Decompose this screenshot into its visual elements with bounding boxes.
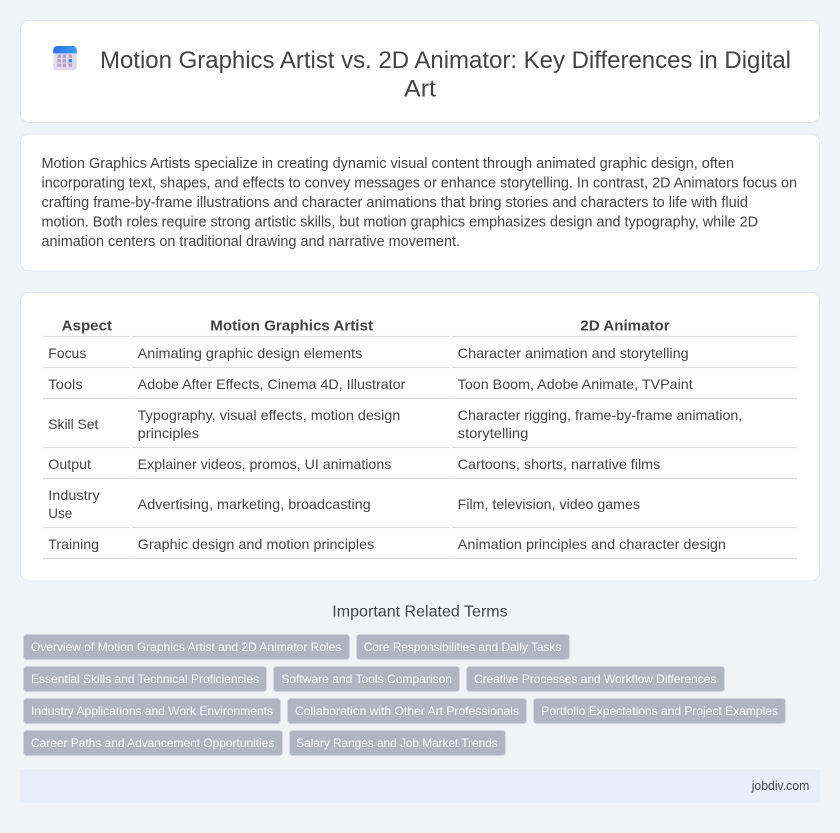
text block: description paragraph: animation centers on traditional drawing and narrative movement.: [42, 234, 460, 250]
table header row: [43, 318, 797, 336]
table row: Training: [43, 536, 797, 558]
table header row: Aspect: [62, 318, 112, 334]
table row: Training: Training: [48, 536, 99, 552]
tag: Overview of Motion Graphics Artist and 2D Animator Roles: [31, 640, 341, 654]
table row: Focus: [43, 345, 797, 368]
tag: Career Paths and Advancement Opportunities: [31, 736, 274, 750]
tag: [24, 634, 350, 660]
table row: Skill Set: Skill Set: [48, 416, 98, 432]
heading: Important Related Terms: Important Related Terms: [332, 604, 508, 620]
table row: Industry Use: Industry: [48, 487, 100, 503]
table row: Tools: Tools: [48, 376, 83, 392]
table row: Skill Set: principles: [138, 425, 199, 441]
text block: description paragraph: [42, 156, 797, 250]
tag: Collaboration with Other Art Professionals: [295, 704, 519, 718]
table row: Focus: Focus: [48, 345, 86, 361]
text block: description paragraph: incorporating text, shapes, and effects to convey messages or enhance storytelling. In contrast, 2D Animators focus on: [42, 176, 797, 192]
table row: Output: Cartoons, shorts, narrative films: [458, 456, 660, 472]
panel: description: [20, 134, 820, 271]
tag: [24, 730, 282, 756]
text block: description paragraph: motion. Both roles require strong artistic skills, but motion graphics emphasizes design and typography, while 2D: [42, 214, 758, 230]
footer: [20, 769, 820, 803]
table row: Output: [43, 456, 797, 478]
icon: calendar: [53, 46, 77, 70]
tag: [534, 698, 786, 724]
table row: Focus: Animating graphic design elements: [138, 345, 362, 361]
panel: header: [20, 20, 820, 122]
table row: Output: Output: [48, 456, 91, 472]
text block: description paragraph: crafting frame-by-frame illustrations and character animations that bring stories and characters to life with fluid: [42, 195, 748, 211]
tag: [466, 666, 724, 692]
table row: Skill Set: [43, 407, 797, 448]
table header row: Motion Graphics Artist: [210, 318, 373, 334]
tag: Essential Skills and Technical Proficiencies: [31, 672, 259, 686]
title: Motion Graphics Artist vs. 2D Animator: Key Differences in Digital: [100, 47, 791, 74]
tag: Creative Processes and Workflow Differences: [474, 672, 716, 686]
title: [100, 47, 791, 102]
table header row: 2D Animator: [580, 318, 670, 334]
table row: Industry Use: Use: [48, 505, 72, 521]
table row: Industry Use: [43, 487, 797, 528]
tag: [288, 698, 526, 724]
tag: Software and Tools Comparison: [281, 672, 452, 686]
related terms tags: [24, 634, 786, 756]
table row: Output: Explainer videos, promos, UI animations: [138, 456, 391, 472]
table row: Skill Set: Typography, visual effects, motion design: [138, 407, 400, 423]
panel: comparison table: [20, 292, 820, 581]
table row: Industry Use: Advertising, marketing, broadcasting: [138, 496, 371, 512]
tag: Salary Ranges and Job Market Trends: [296, 736, 498, 750]
text block: description paragraph: Motion Graphics Artists specialize in creating dynamic visual content through animated graphic design, often: [42, 156, 734, 172]
title: Art: [404, 76, 436, 102]
tag: Portfolio Expectations and Project Examples: [541, 704, 778, 718]
tag: [290, 730, 506, 756]
table row: Tools: Adobe After Effects, Cinema 4D, Illustrator: [138, 376, 406, 392]
table row: Skill Set: storytelling: [458, 425, 528, 441]
table row: Tools: [43, 376, 797, 398]
tag: Core Responsibilities and Daily Tasks: [364, 640, 561, 654]
footer: jobdiv.com: [751, 779, 809, 793]
tag: [274, 666, 460, 692]
table row: Training: Animation principles and character design: [458, 536, 726, 552]
table row: Training: Graphic design and motion principles: [138, 536, 374, 552]
table row: Industry Use: Film, television, video games: [458, 496, 640, 512]
table row: Focus: Character animation and storytelling: [458, 345, 689, 361]
tag: [356, 634, 570, 660]
table row: Tools: Toon Boom, Adobe Animate, TVPaint: [458, 376, 693, 392]
table row: Skill Set: Character rigging, frame-by-frame animation,: [458, 407, 742, 423]
tag: [24, 698, 280, 724]
tag: Industry Applications and Work Environments: [31, 704, 273, 718]
tag: [24, 666, 266, 692]
